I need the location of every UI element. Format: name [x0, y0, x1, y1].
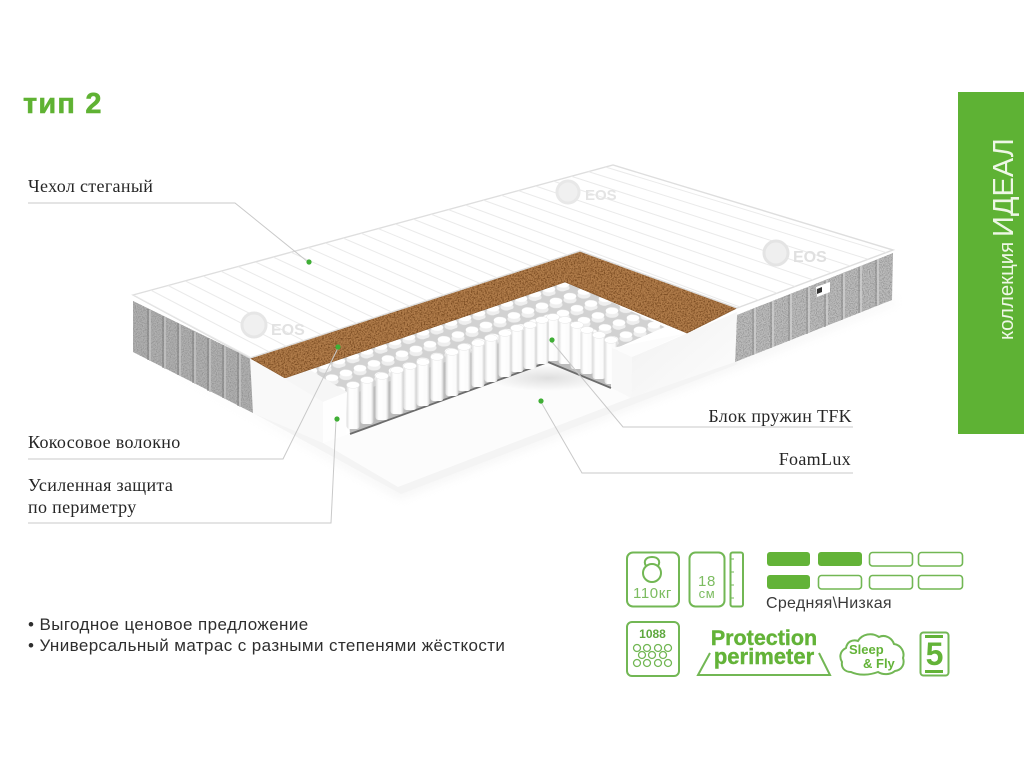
callout: quilted cover: Чехол стеганый — [28, 176, 153, 196]
firmness scale: Средняя\Низкая — [766, 595, 892, 612]
icon: Sleep and Fly cloud — [840, 634, 904, 675]
icon: protection perimeter: Protection — [711, 626, 817, 650]
logo: EOS on cover left — [242, 313, 305, 339]
logo: EOS on cover right — [764, 241, 827, 266]
spring block tops — [300, 280, 665, 396]
pocket springs front row — [346, 317, 548, 429]
gray side panel left — [133, 301, 253, 413]
logo: EOS on cover right: EOS — [793, 249, 827, 266]
gray side panel right — [735, 253, 893, 362]
firmness scale — [766, 552, 962, 612]
callout: quilted cover — [28, 176, 312, 265]
callout: coconut fibre: Кокосовое волокно — [28, 432, 181, 452]
icon: protection perimeter — [698, 626, 830, 675]
icon: Sleep and Fly cloud: Sleep — [849, 642, 884, 657]
logo: EOS on cover top: EOS — [585, 187, 617, 204]
icon: Sleep and Fly cloud: & Fly — [863, 656, 896, 671]
quilted cover — [132, 164, 895, 359]
benefits list: • Выгодное ценовое предложение — [28, 615, 309, 634]
spring block rear wall and floor strip — [347, 320, 612, 434]
callout: spring block: Блок пружин TFK — [708, 406, 852, 426]
icon: height 18 cm: см — [699, 586, 715, 601]
callout: coconut fibre — [28, 344, 341, 459]
mattress cutaway illustration — [133, 165, 906, 498]
icon: max weight 110 kg: 110кг — [633, 585, 672, 602]
callout: reinforced perimeter: по периметру — [28, 497, 137, 517]
panel: collection side banner: коллекция — [996, 236, 1018, 340]
logo: EOS on cover left: EOS — [271, 322, 305, 339]
side label tag — [816, 282, 830, 297]
title: тип 2 — [23, 88, 103, 120]
icon: 5 zones: 5 — [926, 636, 943, 672]
icon: protection perimeter: perimeter — [714, 644, 815, 669]
panel: collection side banner: ИДЕАЛ — [988, 138, 1020, 237]
ground shadow — [140, 298, 895, 498]
pocket springs right row — [546, 314, 618, 384]
icon: height 18 cm — [690, 552, 743, 606]
callout: foam layer — [538, 398, 853, 473]
icon: height 18 cm: 18 — [698, 573, 716, 590]
panel: collection side banner — [958, 92, 1024, 434]
icon: 5 zones — [920, 632, 948, 676]
icon: 1088 springs — [627, 622, 679, 676]
callout: spring block — [549, 337, 853, 427]
perimeter foam left — [250, 358, 347, 443]
callout: foam layer: FoamLux — [779, 449, 851, 469]
perimeter foam right — [612, 310, 737, 398]
callout: reinforced perimeter — [28, 416, 340, 523]
base foam layer — [253, 360, 738, 494]
icon: max weight 110 kg — [627, 552, 679, 606]
benefits list: • Универсальный матрас с разными степенями жёсткости — [28, 636, 505, 655]
logo: EOS on cover top — [557, 181, 617, 204]
callout: reinforced perimeter: Усиленная защита — [28, 475, 173, 495]
coconut fibre layer — [250, 251, 737, 378]
benefits list — [28, 615, 505, 655]
icon: 1088 springs: 1088 — [639, 627, 666, 641]
